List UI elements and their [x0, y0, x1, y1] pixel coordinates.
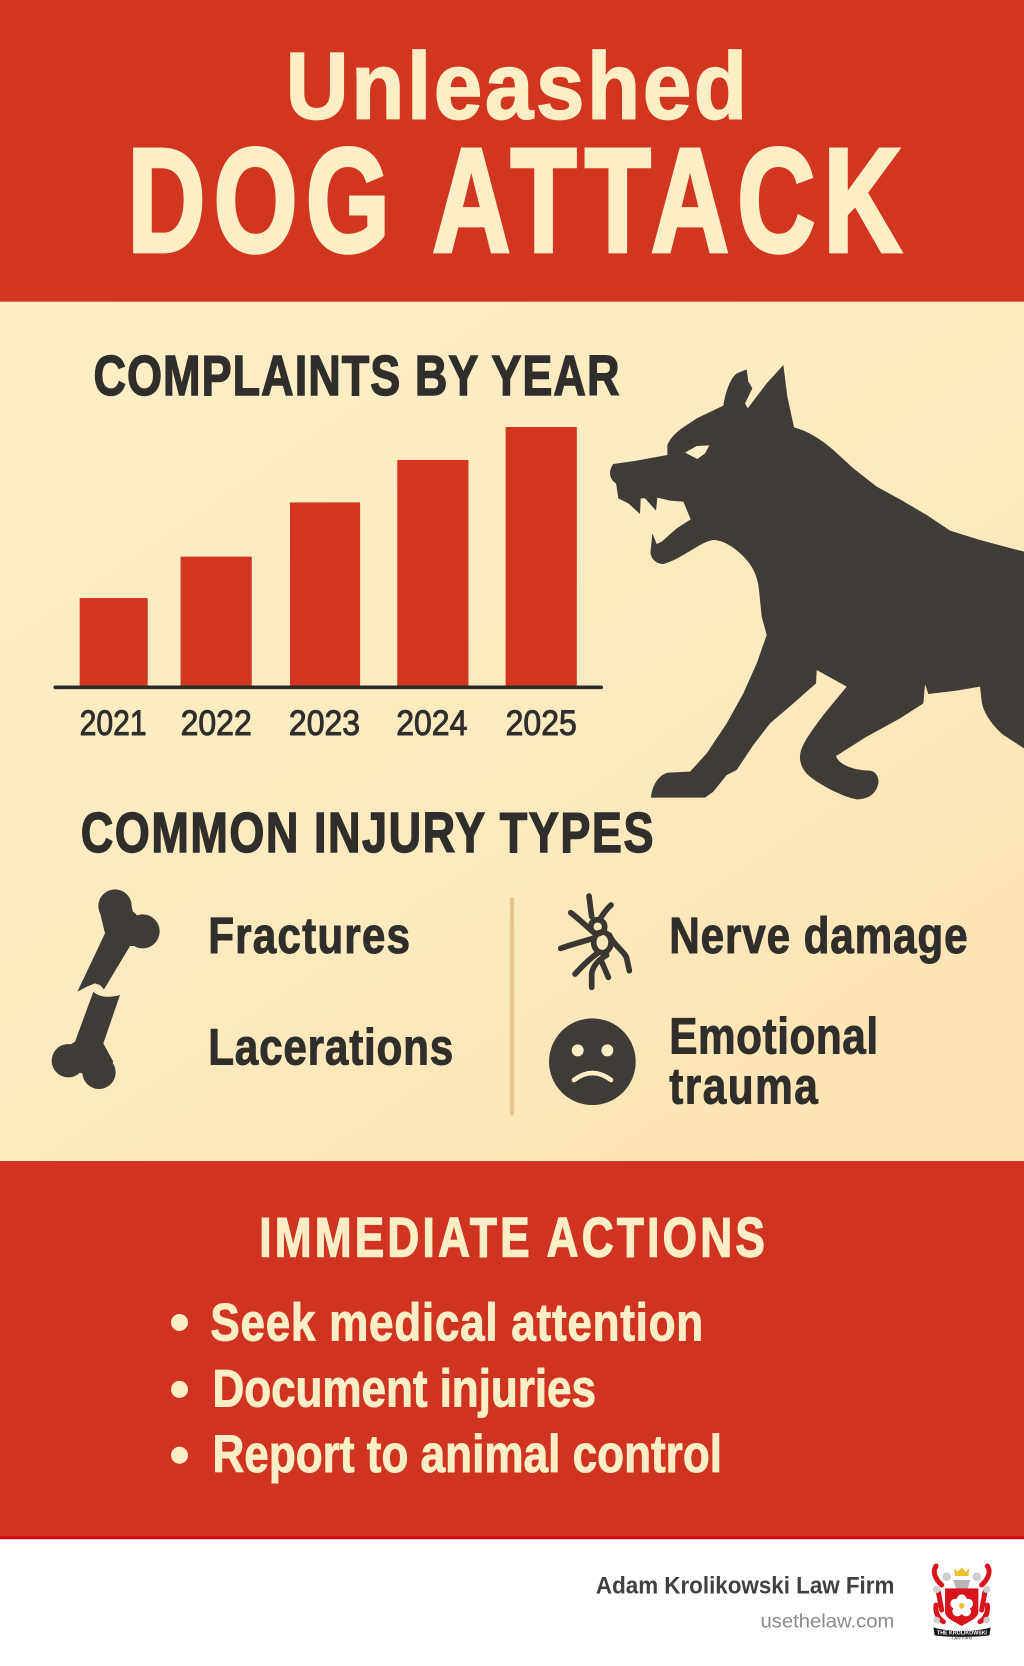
illustration: snarling dog silhouette [610, 365, 1024, 799]
year labels: 2024 [396, 704, 467, 743]
bullet list: Report to animal control [212, 1425, 722, 1484]
label: Lacerations: Lacerations [208, 1019, 453, 1075]
panel: immediate actions [0, 1161, 1024, 1538]
bar chart: complaints by year [55, 427, 601, 743]
heading: immediate actions: IMMEDIATE ACTIONS [259, 1207, 765, 1269]
bar 2024 [397, 460, 468, 687]
bullet list [171, 1294, 722, 1484]
year labels: 2022 [181, 704, 252, 743]
heading: complaints by year: COMPLAINTS BY YEAR [93, 344, 619, 407]
panel: title header [0, 0, 1024, 302]
bar 2021 [80, 598, 148, 687]
icon: nerve [561, 896, 629, 987]
label: Emotional trauma: trauma [669, 1058, 819, 1115]
title line: Unleashed: Unleashed [286, 34, 747, 139]
icon: firm logo crest: THE KROLIKOWSKI [937, 1630, 988, 1636]
icon: sad face [549, 1018, 636, 1105]
firm name: Adam Krolikowski Law Firm [596, 1572, 894, 1599]
dog eye [685, 445, 709, 459]
website: usethelaw.com [761, 1610, 894, 1632]
year labels: 2023 [289, 704, 360, 743]
bar 2023 [290, 502, 360, 687]
panel: cream background [0, 302, 1024, 1162]
label: Emotional trauma: Emotional [669, 1008, 878, 1065]
bullet list: Seek medical attention [210, 1294, 703, 1353]
year labels: 2021 [80, 704, 147, 743]
label: Fractures: Fractures [208, 907, 410, 964]
year labels [80, 704, 577, 743]
heading: common injury types: COMMON INJURY TYPES [81, 801, 653, 864]
bar 2022 [181, 557, 252, 687]
icon: broken bone [52, 889, 160, 1089]
divider [510, 898, 514, 1115]
chart axis [55, 686, 601, 689]
title line: DOG ATTACK: DOG ATTACK [127, 119, 901, 283]
label: Nerve damage: Nerve damage [669, 907, 968, 964]
bullet list: Document injuries [212, 1360, 596, 1418]
label: Emotional trauma [669, 1008, 878, 1115]
panel: footer [0, 1537, 1024, 1666]
bar 2025 [506, 427, 577, 687]
year labels: 2025 [506, 704, 577, 743]
icon: firm logo crest: LAW FIRM [952, 1636, 972, 1640]
icon: firm logo crest [933, 1566, 991, 1640]
